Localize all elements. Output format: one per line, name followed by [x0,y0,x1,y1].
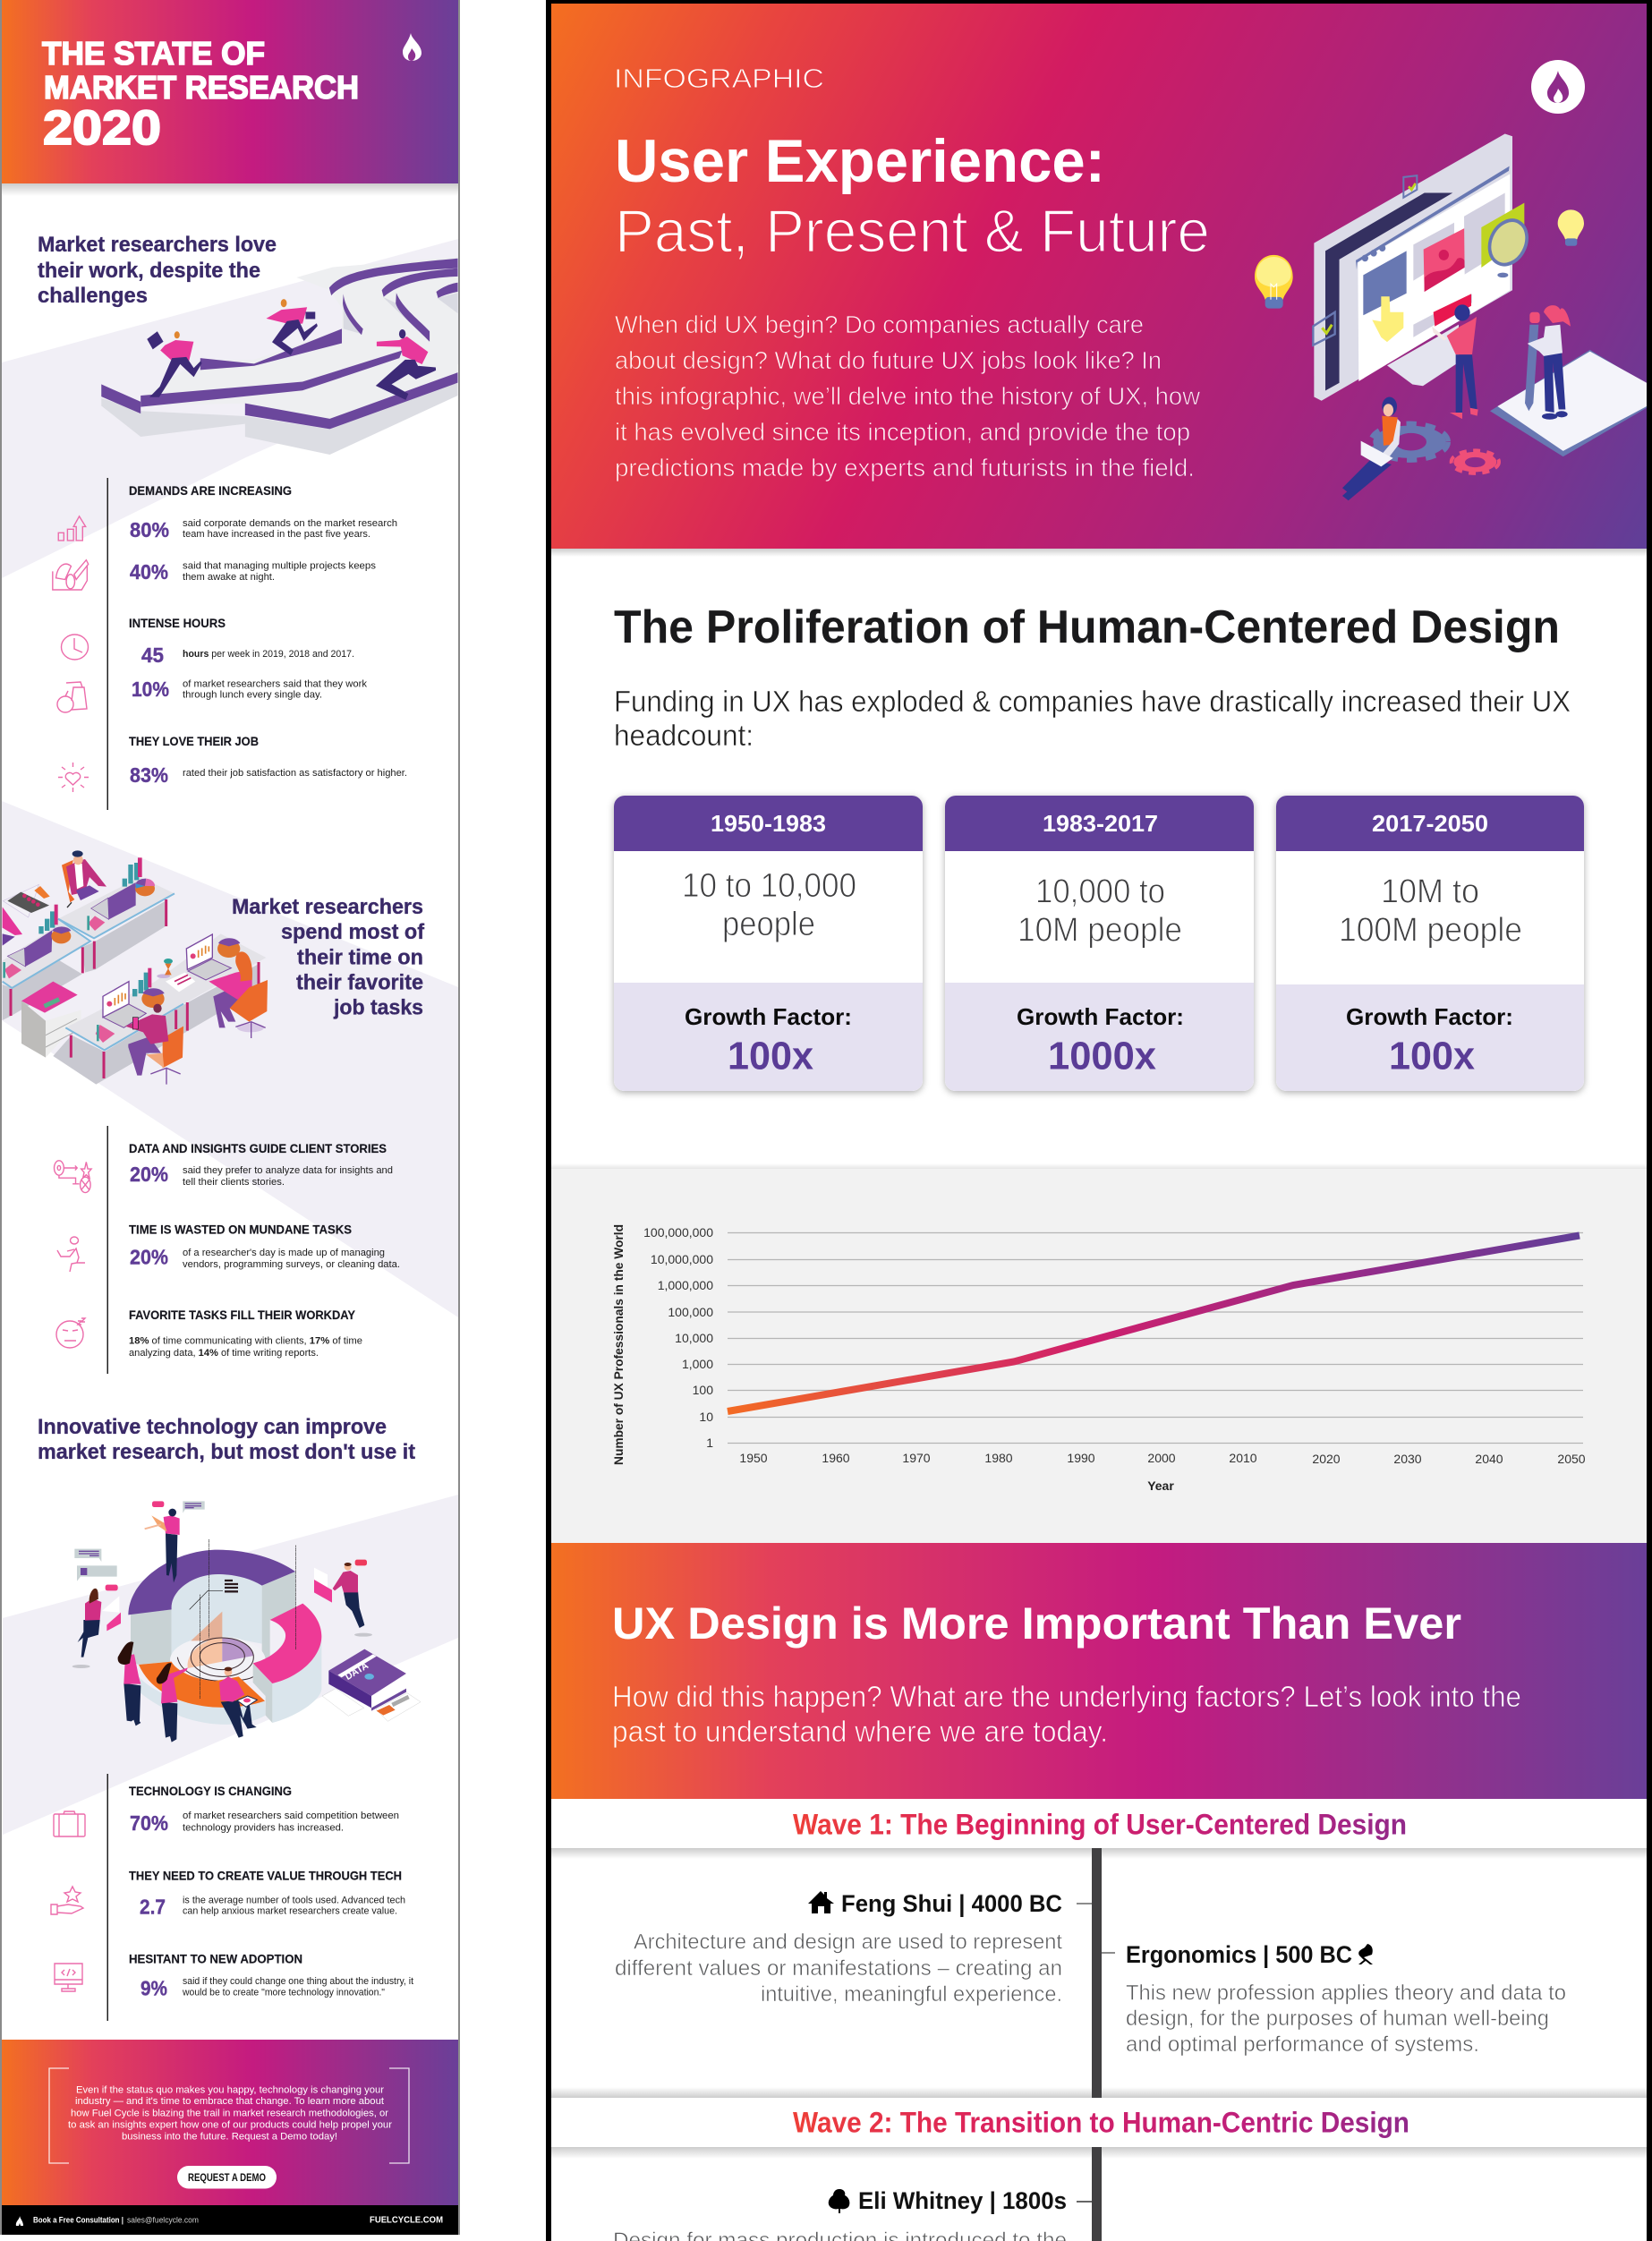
group: hesitant to new adoption: would be to create "more technology innovation." [182,1987,385,1998]
card: 1950-1983: 10 to 10,000 [682,867,856,905]
group: mundane tasks: TIME IS WASTED ON MUNDANE TASKS [129,1223,352,1237]
background band: third section [3,1495,458,1835]
x axis labels: 1950 [739,1451,768,1465]
closing message: business into the future. Request a Demo today! [122,2132,337,2143]
group: mundane tasks: of a researcher's day is made up of managing [183,1248,385,1258]
x axis labels [739,1451,1586,1466]
hero paragraph: predictions made by experts and futurists in the field. [615,454,1195,481]
group: value through tech: THEY NEED TO CREATE VALUE THROUGH TECH [129,1869,402,1883]
icon: flame badge [1531,60,1585,114]
icon: design tools [53,560,89,590]
panel: market research infographic [0,0,460,2235]
hero paragraph: it has evolved since its inception, and provide the top [615,418,1190,446]
closing message: to ask an insights expert how one of our products could help propel your [68,2119,392,2130]
footer bar: FUELCYCLE.COM [370,2216,443,2225]
icon: sleeping face [56,1318,85,1348]
event: feng shui: Architecture and design are used to represent [634,1930,1062,1955]
group: favorite tasks [56,1308,362,1359]
intro text [614,685,1571,752]
header banner [2,0,458,196]
y axis labels [643,1225,713,1450]
hero title: User Experience: [615,127,1105,195]
group: intense hours: of market researchers said that they work [183,678,368,689]
footer bar [2,2205,458,2235]
card: 2017-2050: 100M people [1339,911,1522,949]
lightbulbs [1255,209,1584,309]
group: demands are increasing: DEMANDS ARE INCREASING [129,484,292,498]
event: ergonomics: This new profession applies theory and data to [1126,1981,1566,2005]
runner two [267,299,317,354]
icon: tree [829,2189,849,2213]
group: intense hours: 45 [141,643,164,667]
divider: section one [107,478,108,810]
group: demands are increasing: team have increased in the past five years. [183,529,370,540]
card: 1983-2017: 1983-2017 [1043,810,1158,837]
group: hesitant to new adoption [55,1953,413,1999]
closing message: industry — and it's time to embrace that change. To learn more about [75,2096,384,2107]
heading: market researchers love their work: Market researchers love [38,233,277,257]
group: they love their job [58,735,407,792]
icon: lunch bag and apple [57,682,87,712]
ring chart [128,1539,321,1725]
cropped seated person [3,907,22,946]
icon: briefcase [54,1811,85,1836]
group: value through tech: 2.7 [140,1896,166,1919]
group: favorite tasks: analyzing data, 14% of time writing reports. [129,1348,319,1359]
section banner: UX design importance: UX Design is More Important Than Ever [612,1598,1461,1649]
x axis labels: 1970 [902,1451,931,1465]
person at front laptop [125,1004,183,1085]
title: MARKET RESEARCH [44,69,359,106]
icon: hand holding star [51,1887,83,1914]
runner one [147,331,201,396]
section banner: UX design importance [551,1543,1647,1799]
heading: most time on favorite tasks [232,895,425,1020]
long front desk [53,964,260,1085]
hero paragraph: about design? What do future UX jobs look like? In [615,346,1162,374]
divider: section three [107,1774,108,2021]
person at back desk [62,850,106,907]
event: ergonomics: and optimal performance of systems. [1126,2032,1479,2057]
x axis labels: 2050 [1557,1452,1586,1466]
heading: The Proliferation of Human-Centered Design [614,601,1560,653]
group: intense hours [57,617,368,712]
event: feng shui: Feng Shui | 4000 BC [841,1890,1062,1917]
computer and charts at back desk [88,857,155,931]
group: demands are increasing [53,484,397,590]
icon: person at desk [57,1237,85,1272]
hero paragraph: When did UX begin? Do companies actually care [615,311,1144,338]
group: data and insights: DATA AND INSIGHTS GUIDE CLIENT STORIES [129,1142,387,1155]
icon: code monitor [55,1964,82,1991]
wave 2 heading: Wave 2: The Transition to Human-Centric Design [793,2107,1409,2139]
group: intense hours: through lunch every single day. [183,689,322,700]
y axis labels: 10,000 [675,1331,713,1345]
card: 1983-2017: 10M people [1018,911,1182,949]
y axis labels: 100,000 [668,1305,713,1319]
notepad and designer with pencil [1490,305,1647,456]
icon: growth arrow [58,516,86,541]
group: they love their job: 83% [130,763,168,787]
section: proliferation of human-centered design [614,601,1584,1091]
clipboard [3,884,50,917]
background band: second section [2,801,458,1317]
heading: innovative technology [38,1415,415,1464]
intro text: Funding in UX has exploded & companies have drastically increased their UX [614,685,1571,718]
hero banner [551,3,1647,557]
event: ergonomics [1102,1941,1566,2057]
group: demands are increasing: 80% [130,518,169,541]
group: intense hours: 10% [132,677,169,701]
group: mundane tasks: 20% [130,1246,168,1269]
hero paragraph: this infographic, we’ll delve into the history of UX, how [615,382,1201,410]
y axis labels: 100 [693,1383,713,1397]
heading: most time on favorite tasks: spend most of [281,920,425,944]
group: intense hours: INTENSE HOURS [129,617,226,630]
panel border [546,0,1652,2241]
line chart: number of UX professionals in the world [551,1163,1647,1543]
person standing left [118,1641,141,1725]
person seated with tablet [219,1667,257,1738]
heading: most time on favorite tasks: their time on [297,945,423,970]
card: 1950-1983: Growth Factor: [685,1003,852,1030]
laptops and charts [96,934,240,1043]
y axis labels: 1,000,000 [658,1278,713,1292]
closing message: Even if the status quo makes you happy, technology is changing your [76,2085,384,2096]
card: 1983-2017: Growth Factor: [1017,1003,1184,1030]
group: technology is changing: TECHNOLOGY IS CHANGING [129,1785,292,1798]
group: they love their job: THEY LOVE THEIR JOB [129,735,259,748]
heading: market researchers love their work: their work, despite the [38,259,260,283]
card: 1983-2017: 1000x [1048,1035,1157,1078]
icon: clock [61,635,88,660]
group: value through tech [51,1869,405,1919]
heading: market researchers love their work [38,233,277,308]
event: eli whitney [613,2187,1092,2241]
intro text: headcount: [614,719,754,752]
button: request a demo [177,2166,277,2189]
y axis labels: 1,000 [682,1357,713,1371]
y axis labels: 10,000,000 [651,1252,713,1266]
hero title: Past, Present & Future [615,197,1210,265]
x axis labels: 1960 [822,1451,850,1465]
desk back right [82,901,166,973]
card: 1950-1983 [614,796,923,1091]
group: technology is changing: of market researchers said competition between [183,1811,399,1821]
heading: most time on favorite tasks: job tasks [333,995,423,1020]
runner three [377,329,436,398]
y axis labels: 1 [706,1436,713,1450]
background band: first section [2,239,458,578]
event: feng shui: different values or manifestations – creating an [615,1956,1062,1981]
group: demands are increasing: 40% [130,560,168,584]
event: eli whitney: Eli Whitney | 1800s [858,2187,1067,2214]
icon: house [808,1891,834,1913]
group: technology is changing [54,1785,399,1836]
group: demands are increasing: them awake at night. [183,572,275,583]
x axis labels: 2020 [1312,1452,1341,1466]
heading: most time on favorite tasks: Market researchers [232,895,423,919]
person floating right with laptop [314,1560,372,1637]
group: they love their job: rated their job satisfaction as satisfactory or higher. [183,768,407,779]
footer bar: Book a Free Consultation | [33,2216,123,2225]
gears and seated designer [1342,397,1499,500]
icon: flame [403,33,422,61]
group: technology is changing: technology providers has increased. [183,1822,344,1833]
data line [728,1235,1580,1411]
event: ergonomics: Ergonomics | 500 BC [1126,1941,1352,1968]
wave 1 heading: Wave 1: The Beginning of User-Centered Design [793,1808,1407,1840]
event: feng shui [615,1890,1092,2007]
card: 1983-2017: 10,000 to [1035,873,1165,911]
card: 2017-2050: 10M to [1381,873,1479,911]
illustration: researchers at office desks [3,850,268,1085]
icon: glowing heart [58,763,89,792]
group: technology is changing: 70% [130,1811,168,1835]
computer and charts at left desk [4,905,71,978]
closing message [68,2085,392,2143]
footer bar: sales@fuelcycle.com [127,2216,199,2225]
group: favorite tasks: FAVORITE TASKS FILL THEIR WORKDAY [129,1308,355,1322]
card: 1950-1983: 100x [728,1035,814,1078]
hero title [615,127,1210,265]
monitor [1313,133,1534,401]
illustration: UX team building a website [1255,133,1647,500]
designer at button [1432,304,1478,419]
event: ergonomics: design, for the purposes of human well-being [1126,2007,1549,2031]
heading: market researchers love their work: challenges [38,284,148,308]
group: data and insights: 20% [130,1163,168,1186]
timeline spine [1092,1848,1102,2241]
card: 1950-1983: people [722,906,815,943]
x axis labels: 1990 [1067,1451,1095,1465]
icon: footer flame [16,2216,23,2226]
section banner: UX design importance: How did this happen? What are the underlying factors? Let’s look into the [612,1680,1521,1713]
person floating left with laptop [72,1549,121,1668]
group: intense hours: hours per week in 2019, 2018 and 2017. [183,649,354,660]
heading: most time on favorite tasks: their favorite [296,970,423,995]
line chart: number of UX professionals in the world: Number of UX Professionals in the World [612,1224,626,1465]
axis titles: Year [1147,1478,1174,1493]
heading: innovative technology: Innovative technology can improve [38,1415,387,1439]
x axis labels: 2040 [1475,1452,1503,1466]
card: 2017-2050 [1276,796,1584,1091]
group: favorite tasks: 18% of time communicating with clients, 17% of time [129,1335,362,1346]
card: 2017-2050: 100x [1389,1035,1476,1078]
y axis labels: 100,000,000 [643,1225,713,1240]
group: hesitant to new adoption: 9% [141,1976,167,1999]
timeline [546,0,1652,2241]
filing cabinet [21,982,81,1058]
group: hesitant to new adoption: HESITANT TO NEW ADOPTION [129,1953,302,1965]
group: value through tech: can help anxious market researchers create value. [183,1906,397,1917]
group: hesitant to new adoption: said if they could change one thing about the industry, it [183,1976,413,1987]
y axis labels: 10 [699,1410,713,1424]
group: data and insights: said they prefer to analyze data for insights and [183,1165,393,1176]
card: 2017-2050: Growth Factor: [1346,1003,1513,1030]
group: demands are increasing: said that managing multiple projects keeps [183,560,377,571]
group: data and insights [55,1142,393,1193]
brackets [49,2068,409,2163]
person pointing [157,1663,188,1743]
group: mundane tasks: vendors, programming surveys, or cleaning data. [183,1259,400,1270]
icon: office chair [1358,1944,1373,1964]
x axis labels: 2000 [1147,1451,1176,1465]
event: feng shui: intuitive, meaningful experience. [761,1982,1062,2007]
hero paragraph [615,311,1201,481]
x axis labels: 2030 [1393,1452,1422,1466]
card: 1950-1983: 1950-1983 [711,810,826,837]
divider: section two [107,1126,108,1374]
x axis labels: 1980 [984,1451,1013,1465]
section banner: UX design importance: past to understand where we are today. [612,1715,1108,1748]
person on chart with tablet [145,1501,205,1582]
group: data and insights: tell their clients stories. [183,1177,285,1188]
group: demands are increasing: said corporate demands on the market research [183,518,397,529]
person at rear laptop [209,951,268,1038]
title: 2020 [43,101,161,155]
button: request a demo: REQUEST A DEMO [188,2173,266,2184]
closing message: how Fuel Cycle is blazing the trail in market research methodologies, or [71,2109,388,2119]
heading: innovative technology: market research, but most don't use it [38,1440,415,1464]
title: THE STATE OF [42,35,265,72]
icon: workflow [55,1161,91,1193]
illustration: runners on a maze path [101,257,457,455]
title [42,35,359,155]
data book and papers: DATA [344,1660,370,1683]
group: mundane tasks [57,1223,400,1272]
x axis labels: 2010 [1229,1451,1257,1465]
data book and papers [322,1649,421,1721]
card: 1983-2017 [945,796,1254,1091]
card: 2017-2050: 2017-2050 [1372,810,1488,837]
call to action banner [2,2040,458,2205]
eyebrow: INFOGRAPHIC [614,63,824,94]
panel: user experience infographic [546,0,1652,2241]
illustration: people around a 3D ring chart [72,1501,421,1743]
group: value through tech: is the average number of tools used. Advanced tech [183,1896,405,1906]
desk left [3,960,82,1020]
